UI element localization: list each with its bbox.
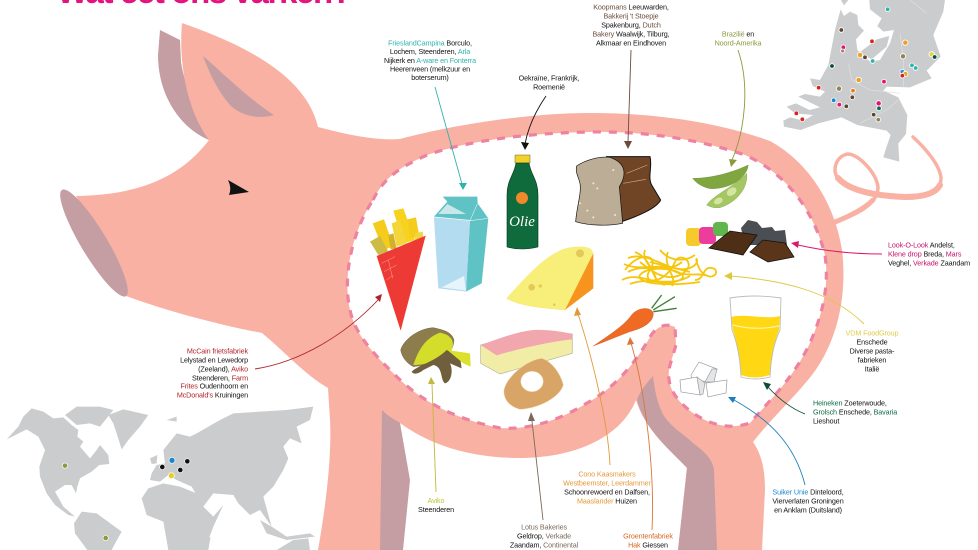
label: pasta: fabrieken	[858, 356, 886, 364]
food: potato	[401, 328, 471, 383]
label: dairy: Nijkerk en A-ware en Fonterra	[384, 56, 476, 65]
food: oil bottle: Olie	[509, 214, 535, 230]
label: cheese: Maaslander Huizen	[577, 496, 637, 506]
food: soy beans	[693, 165, 748, 208]
label: bread: Bakkerij 't Stoepje	[603, 12, 659, 20]
label: pasta: Italië	[865, 364, 879, 374]
label: fries: (Zeeland), Aviko	[198, 364, 248, 374]
label: sugar: Vierverlaten Groningen	[772, 496, 844, 506]
label: fries: Frites Oudenhoorn en	[180, 382, 248, 390]
arrow: beans	[729, 50, 745, 167]
arrow: bread	[624, 50, 632, 149]
map dots	[794, 7, 937, 122]
label: oil: Oekraïne, Frankrijk,	[519, 74, 579, 82]
label: cheese: Cono Kaasmakers	[578, 470, 636, 478]
label: bread: Bakery Waalwijk, Tilburg,	[592, 30, 670, 38]
pig tail	[835, 137, 941, 222]
label: biscuit: Geldrop, Verkade	[517, 532, 571, 540]
label: beans: Noord-Amerika	[715, 38, 762, 48]
label: bread: Koopmans Leeuwarden,	[593, 2, 669, 12]
food: sugar cubes	[680, 362, 727, 397]
label: biscuit: Lotus Bakeries	[521, 522, 567, 532]
label: sugar: Suiker Unie Dinteloord,	[772, 488, 844, 496]
food: fries	[370, 208, 426, 331]
far ear	[158, 30, 214, 140]
label: dairy: Lochem, Steenderen, Arla	[390, 47, 470, 56]
label: dairy: boterserum)	[411, 73, 449, 82]
label: dairy: Heerenveen (melkzuur en	[390, 64, 470, 74]
arrow: dairy	[435, 87, 467, 190]
label: fries: Lelystad en Lewedorp	[180, 356, 248, 364]
label: pasta: Diverse pasta-	[850, 346, 895, 356]
label: pasta: Enschede	[856, 338, 888, 346]
arrow: carrot	[627, 337, 653, 530]
label: dairy: FrieslandCampina Borculo,	[388, 38, 472, 48]
pig body	[76, 23, 843, 550]
label: pasta: VDM FoodGroup	[846, 328, 898, 338]
label: biscuit: Zaandam, Continental	[510, 540, 578, 550]
arrow: oil	[521, 96, 546, 150]
map: Netherlands	[783, 0, 945, 162]
food: milk carton	[434, 197, 488, 292]
arrow: pasta	[724, 272, 864, 324]
eye	[228, 180, 249, 195]
label: candy: Veghel, Verkade Zaandam	[888, 258, 970, 268]
label: cheese: Westbeemster, Leerdammer	[563, 478, 652, 488]
label: candy: Klene drop Breda, Mars	[888, 250, 961, 258]
label: beer: Grolsch Enschede, Bavaria	[813, 408, 897, 416]
label: fries: McCain frietsfabriek	[187, 346, 249, 356]
label: bread: Spakenburg, Dutch	[601, 20, 661, 30]
front leg shadow	[380, 410, 410, 550]
label: potato: Steenderen	[418, 505, 454, 514]
arrow: candy	[791, 241, 882, 254]
food: cheese	[507, 247, 593, 310]
label: fries: McDonald's Kruiningen	[177, 390, 248, 400]
arrow: cheese	[574, 307, 610, 465]
food: candy and liquorice	[686, 220, 794, 262]
snout	[51, 183, 137, 303]
label: beans: Brazilië en	[722, 30, 754, 38]
arrow: potato	[428, 377, 436, 492]
label: beer: Lieshout	[813, 416, 839, 426]
label: potato: Aviko	[428, 496, 445, 505]
rear leg shadow	[637, 376, 717, 550]
food: sponge cake	[481, 330, 572, 374]
arrow: biscuit	[528, 412, 543, 520]
belly window	[347, 132, 826, 428]
label: bread: Alkmaar en Eindhoven	[596, 38, 666, 48]
food: pasta	[622, 250, 716, 286]
world dots	[62, 457, 190, 541]
arrow: sugar	[728, 397, 805, 485]
label: carrot: Groentenfabriek	[623, 532, 673, 540]
label: carrot: Hak Giessen	[628, 540, 668, 550]
label: cheese: Schoonrewoerd en Dalfsen,	[564, 488, 650, 496]
label: candy: Look-O-Look Andelst,	[888, 240, 955, 250]
map: world	[7, 407, 315, 550]
arrow: beer	[763, 382, 805, 414]
label: sugar: en Anklam (Duitsland)	[774, 506, 842, 514]
food: beer glass	[730, 296, 781, 379]
food: oil bottle	[507, 155, 538, 249]
label: oil: Roemenië	[533, 82, 565, 92]
label: fries: Steenderen, Farm	[192, 374, 248, 382]
food: bread	[576, 157, 661, 225]
food: biscuit	[504, 358, 563, 409]
food: carrot	[593, 295, 677, 346]
arrow: fries	[255, 294, 382, 369]
inner ear	[203, 56, 274, 117]
label: beer: Heineken Zoeterwoude,	[813, 398, 887, 408]
